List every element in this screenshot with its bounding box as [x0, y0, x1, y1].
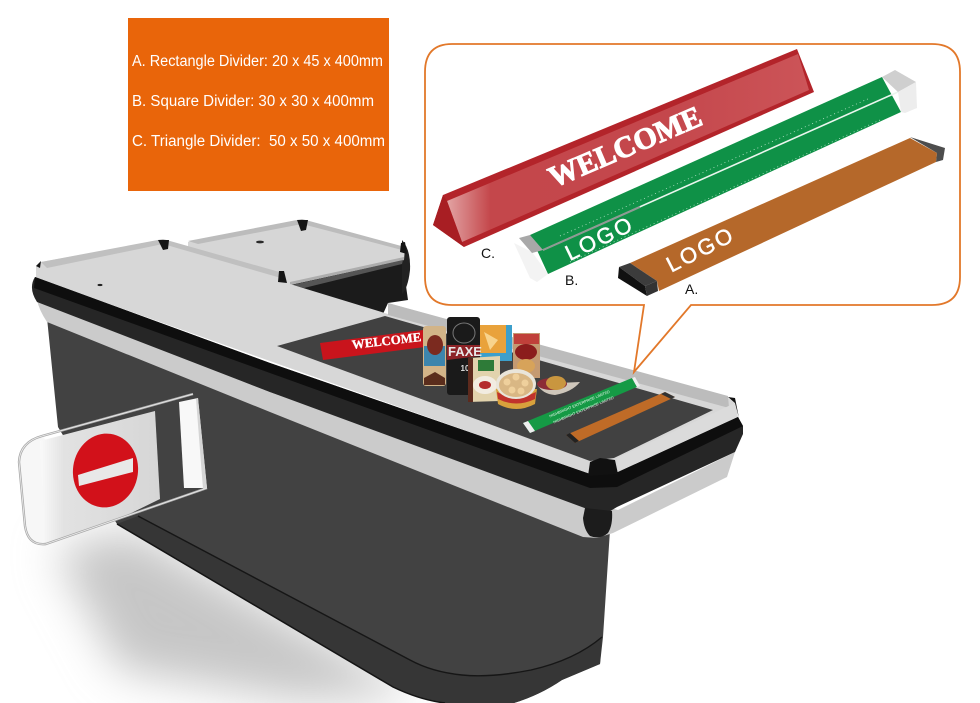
checkout counter [32, 219, 743, 703]
beer can: 10 [461, 364, 470, 373]
orange snack box [478, 325, 512, 361]
red food box [513, 333, 540, 378]
counter body [47, 318, 610, 703]
gate frame [19, 394, 207, 544]
back shelf interior [290, 258, 408, 314]
logo label: LOGO [662, 221, 739, 277]
orange size panel [128, 18, 389, 191]
divider C: red triangle [433, 49, 814, 247]
products group [423, 317, 580, 409]
lower corner cap [583, 508, 612, 537]
size text: rectangle divider: A. Rectangle Divider: 20 x 45 x 400mm [132, 53, 383, 70]
no entry sign [68, 429, 143, 512]
small can [423, 326, 446, 386]
conveyor mat [277, 316, 713, 461]
main tray top [36, 239, 739, 474]
miniature green divider [523, 377, 640, 433]
plate of food [537, 376, 580, 395]
cookie tin [496, 369, 537, 409]
soup box [468, 356, 500, 402]
right end cap [882, 70, 917, 113]
divider B label: B. [565, 272, 578, 288]
miniature orange divider [566, 392, 675, 443]
miniature green divider: HIGHBRIGHT ENTERPRISE LIMITED [549, 390, 611, 418]
welcome label: WELCOME [544, 100, 707, 194]
corner cap [588, 458, 618, 476]
beer can [447, 317, 482, 395]
swing gate sign [19, 394, 207, 544]
back shelf post [402, 240, 410, 294]
left end cap [514, 235, 548, 282]
gate glass [19, 436, 52, 544]
floor shadow [55, 530, 420, 700]
beer can: FAXE [448, 344, 482, 359]
gate hinge [179, 398, 207, 489]
miniature green divider: HIGHBRIGHT ENTERPRISE LIMITED [553, 396, 615, 424]
near end cap [618, 263, 658, 296]
black bumper rail [32, 277, 743, 513]
gate panel [40, 411, 160, 543]
kick plate [117, 516, 602, 703]
divider A: orange rectangle [618, 137, 945, 296]
far end cap [910, 137, 945, 162]
logo label: LOGO [561, 211, 638, 266]
divider C label: C. [481, 245, 495, 261]
divider A label: A. [685, 281, 698, 297]
miniature welcome divider [320, 330, 425, 360]
back shelf tray [188, 219, 407, 288]
size text: square divider: B. Square Divider: 30 x 30 x 400mm [132, 93, 374, 110]
callout bubble [425, 44, 960, 372]
right end plate [617, 403, 738, 473]
divider B: green square [514, 70, 917, 282]
lower aluminium band [37, 300, 735, 538]
miniature welcome divider: WELCOME [351, 330, 422, 352]
size text: triangle divider: C. Triangle Divider: 50 x 50 x 400mm [132, 133, 385, 150]
